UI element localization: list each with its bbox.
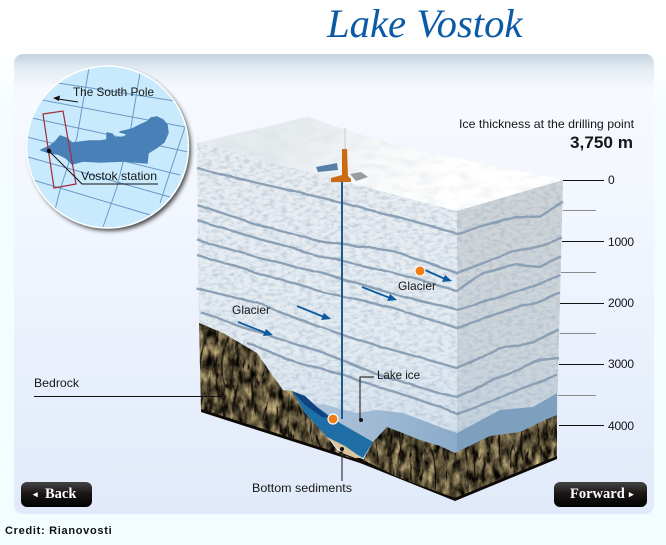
Vostok station leader — [47, 149, 158, 184]
label: Bottom sediments — [252, 447, 352, 495]
label: The South Pole: The South Pole — [73, 85, 154, 99]
button: Back — [21, 482, 92, 507]
lake ice layer — [305, 397, 457, 460]
label: Vostok station: Vostok station — [81, 169, 157, 183]
depth scale: 3000 — [608, 357, 634, 371]
bottom sediments — [327, 437, 362, 458]
sub-glacial lake water — [292, 391, 373, 458]
label: Lake ice: Lake ice — [377, 368, 420, 382]
button: Back: ◂ — [33, 489, 38, 499]
label: glacier right: Glacier — [398, 279, 436, 293]
marker: ice surface sample — [415, 266, 425, 276]
button: Back: Back — [45, 486, 76, 502]
map grid — [27, 68, 188, 227]
station buildings — [316, 163, 368, 181]
depth scale: 0 — [608, 173, 615, 187]
bedrock right — [363, 415, 557, 498]
flow arrows — [238, 270, 452, 336]
inset map: Lake Vostok location — [26, 66, 191, 231]
depth scale: 1000 — [608, 235, 634, 249]
arrow to the South Pole — [53, 96, 78, 102]
ice thickness heading: Ice thickness at the drilling point — [459, 117, 635, 131]
ice block right face — [457, 180, 563, 455]
button: Forward: Forward — [570, 486, 625, 502]
credit: Credit: Rianovosti — [5, 525, 112, 537]
marker: lake — [328, 414, 338, 424]
label: Bottom sediments: Bottom sediments — [252, 481, 352, 495]
label: Bedrock: Bedrock — [34, 376, 80, 390]
lake outline — [41, 117, 168, 164]
title: Lake Vostok — [327, 1, 522, 46]
label: Lake ice — [359, 368, 420, 422]
depth scale — [558, 173, 634, 433]
ice strata lines — [197, 168, 563, 415]
label: glacier left: Glacier — [232, 303, 270, 317]
depth scale: 2000 — [608, 296, 634, 310]
ice block diagram — [197, 117, 563, 501]
drill borehole — [341, 180, 343, 419]
ice block top face — [197, 117, 563, 212]
button: Forward — [554, 482, 647, 507]
rock shadow edge — [201, 404, 557, 501]
button: Forward: ▸ — [629, 489, 634, 499]
ice thickness heading: 3,750 m — [570, 133, 633, 152]
drilling area rectangle — [43, 111, 76, 188]
ice block front face — [197, 143, 457, 445]
depth scale: 4000 — [608, 419, 634, 433]
bedrock left — [199, 323, 360, 460]
label: Bedrock — [34, 376, 226, 398]
lake ice layer, right side — [457, 393, 557, 458]
ice thickness heading — [459, 117, 635, 152]
drill rig — [331, 128, 351, 182]
